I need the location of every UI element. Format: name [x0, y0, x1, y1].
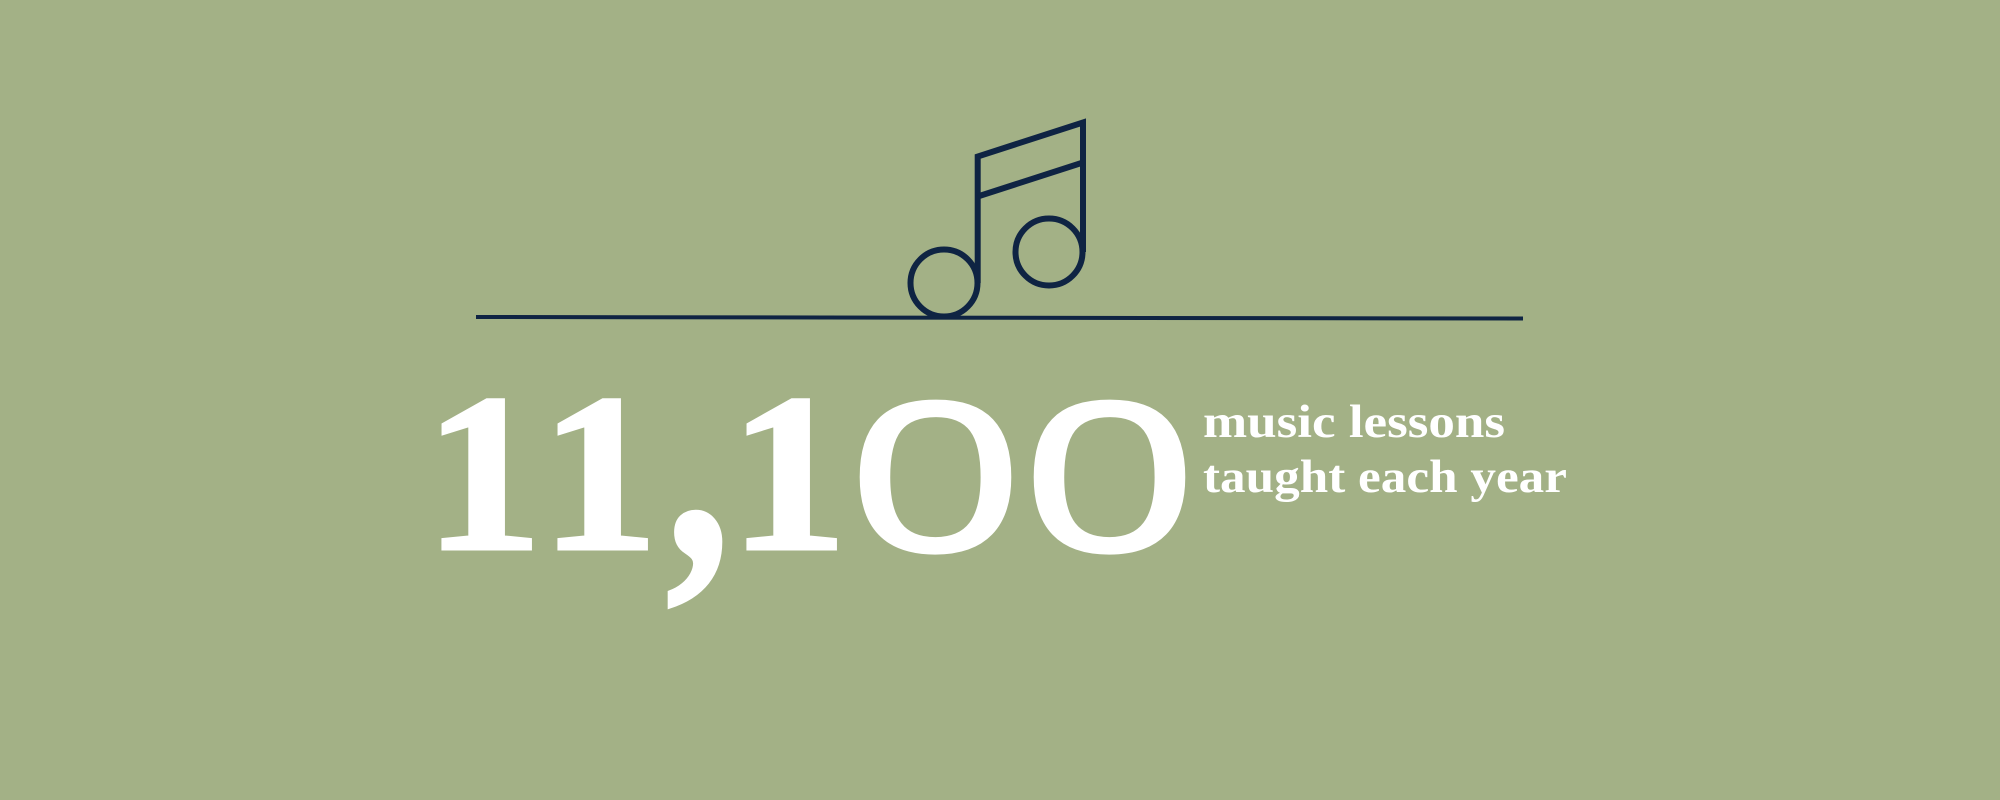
icon: music note on a line	[476, 122, 1523, 318]
big number: 11,100: 1	[729, 349, 848, 599]
big number: 11,100: ,	[666, 279, 730, 627]
big number: 11,100	[424, 279, 1196, 627]
big number: 11,100: 1	[540, 349, 659, 599]
caption: music lessons taught each year: taught each year	[1203, 451, 1567, 503]
caption: music lessons taught each year	[1203, 396, 1567, 503]
caption: music lessons taught each year: music lessons	[1203, 396, 1505, 448]
big number: 11,100: 0	[1023, 356, 1196, 597]
big number: 11,100: 0	[849, 356, 1022, 597]
big number: 11,100: 1	[424, 349, 543, 599]
